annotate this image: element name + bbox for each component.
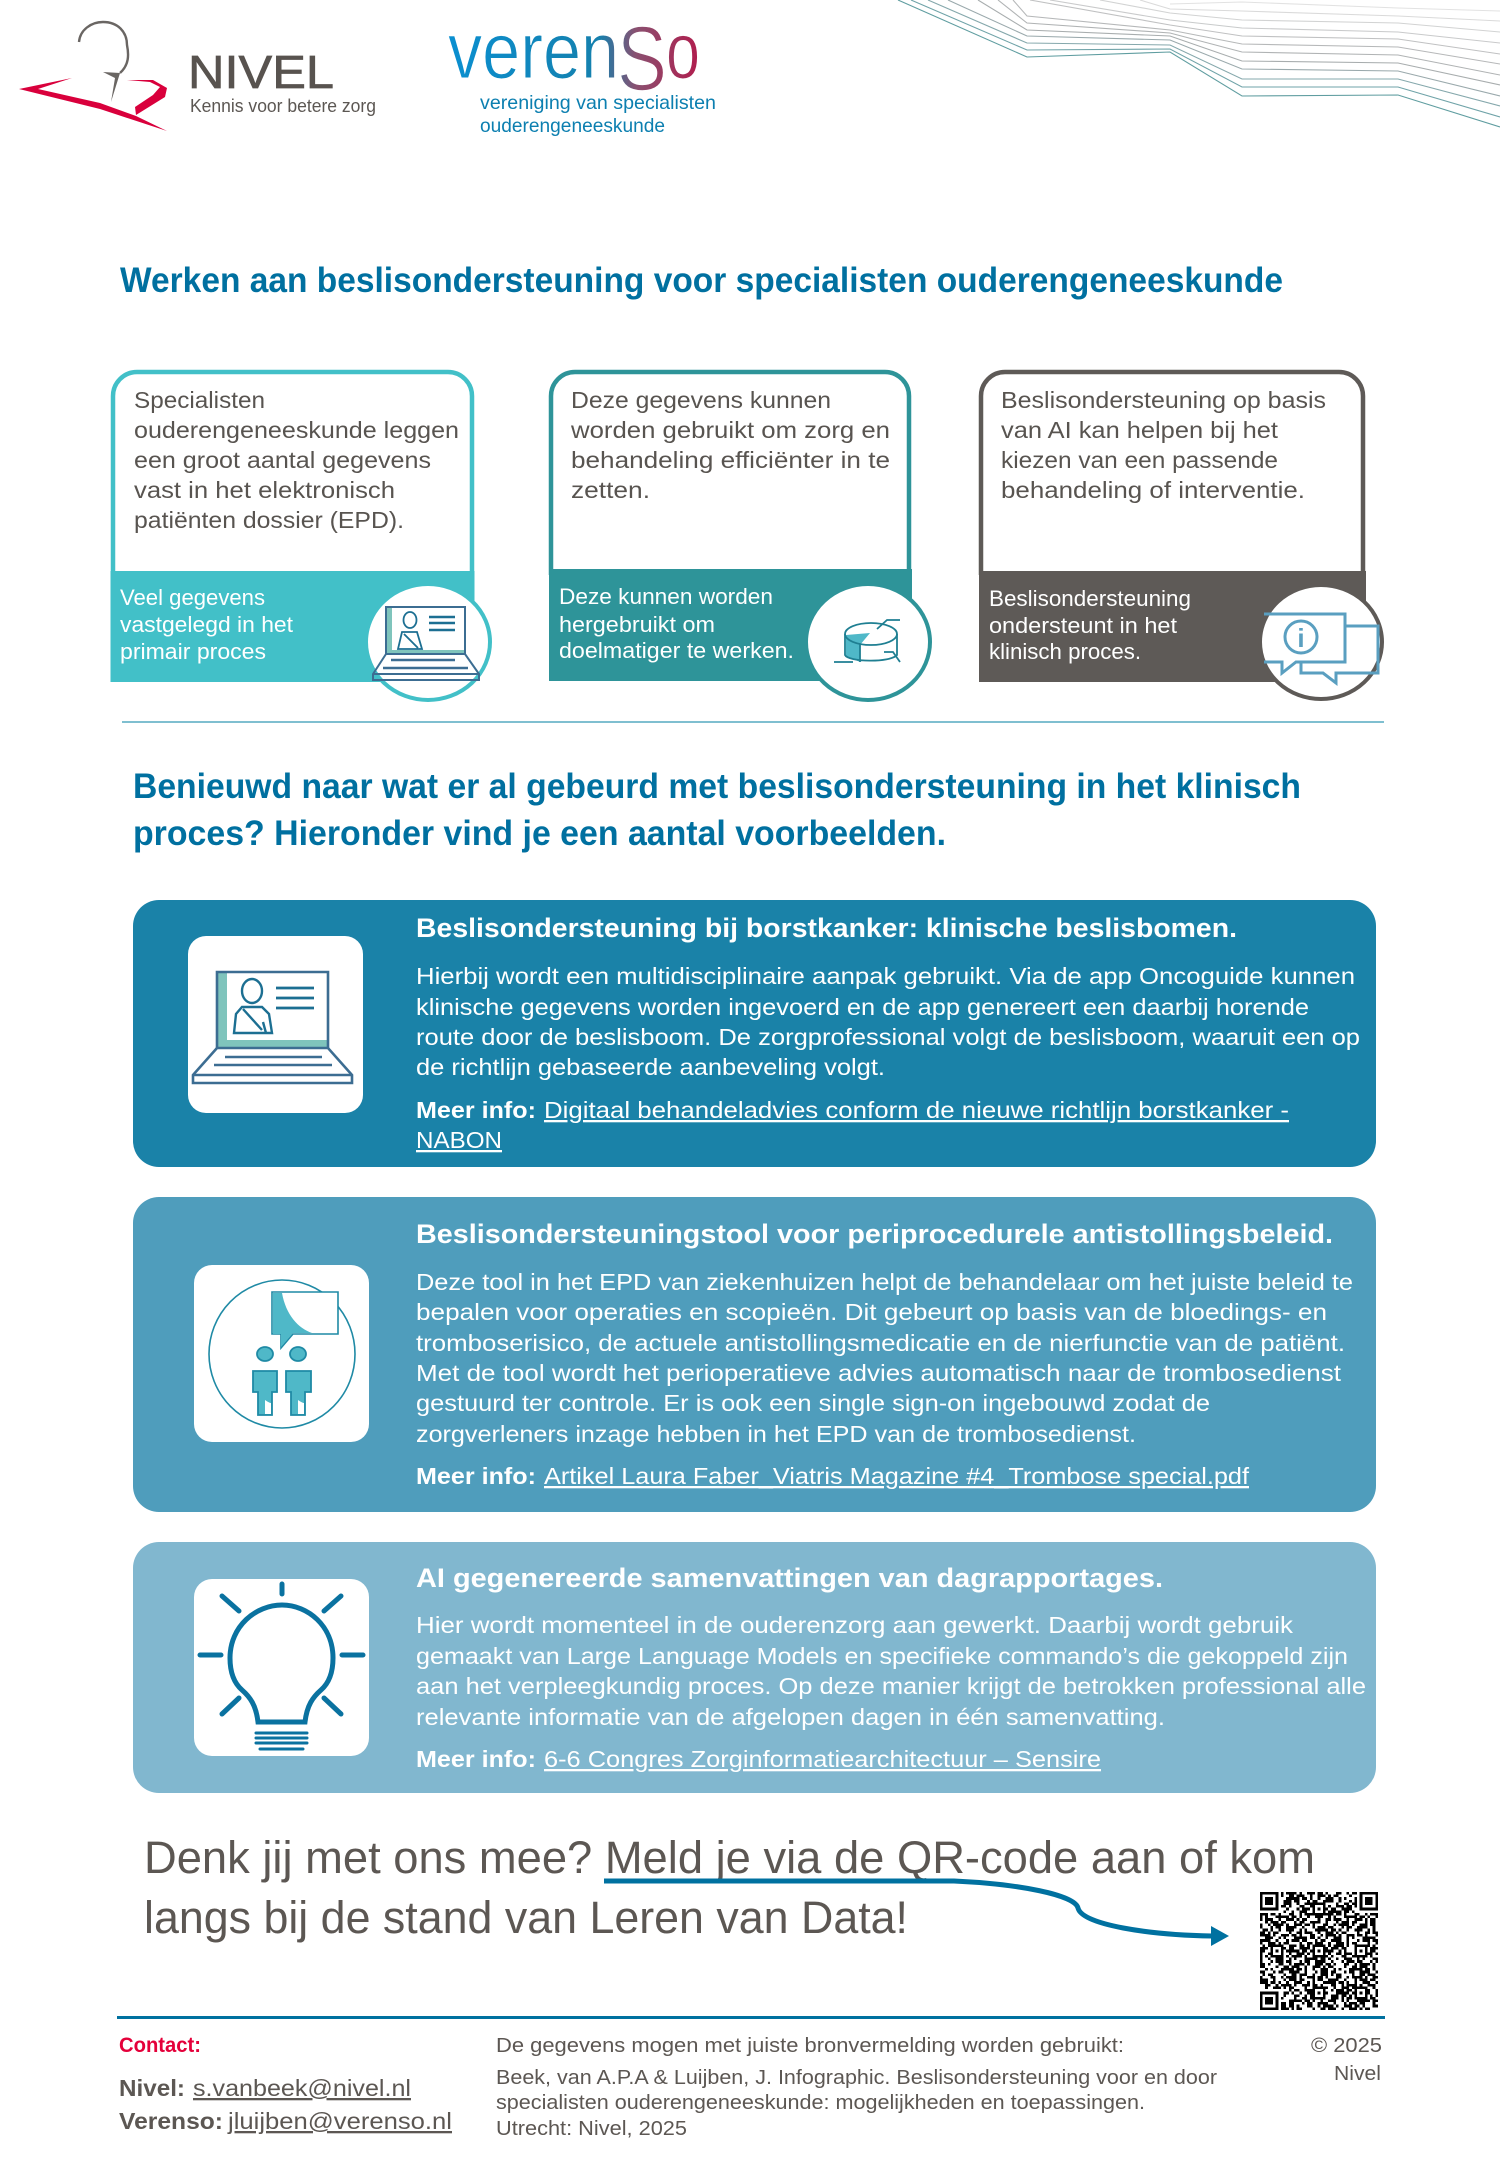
- text: card band: doelmatiger te werken.: [559, 638, 794, 663]
- panel: card veel gegevens: [110, 372, 490, 700]
- title: Werken aan beslisondersteuning voor specialisten ouderengeneeskunde: [120, 261, 1283, 300]
- text: card body: behandeling efficiënter in te: [571, 447, 890, 473]
- text: card band: Deze kunnen worden: [559, 584, 773, 609]
- footer: citation: Beek, van A.P.A & Luijben, J. Infographic. Beslisondersteuning voor en door: [496, 2066, 1217, 2089]
- text: heading: AI gegenereerde samenvattingen van dagrapportages.: [416, 1563, 1163, 1593]
- text: description: zorgverleners inzage hebben in het EPD van de trombosedienst.: [416, 1421, 1136, 1447]
- text: card body: patiënten dossier (EPD).: [134, 507, 404, 533]
- footer: citation: Utrecht: Nivel, 2025: [496, 2117, 687, 2140]
- text: call to action: [144, 1832, 1315, 1943]
- text: card body: ouderengeneeskunde leggen: [134, 417, 459, 443]
- text: description: tromboserisico, de actuele antistollingsmedicatie en de nierfunctie van de patiënt.: [416, 1330, 1345, 1356]
- text: card band: hergebruikt om: [559, 612, 715, 637]
- icon: info chat bubbles in circle: i: [1297, 623, 1305, 653]
- text: description: Met de tool wordt het perioperatieve advies automatisch naar de trombosedienst: [416, 1360, 1342, 1386]
- text: description: Deze tool in het EPD van ziekenhuizen helpt de behandelaar om het juiste beleid te: [416, 1269, 1353, 1295]
- footer: contact: s.vanbeek@nivel.nl: [193, 2075, 411, 2101]
- text: card band: [989, 586, 1191, 664]
- icon: info chat bubbles in circle: [1260, 585, 1382, 699]
- text: card band: primair proces: [120, 639, 266, 664]
- text: heading: Beslisondersteuning bij borstkanker: klinische beslisbomen.: [416, 913, 1237, 943]
- text: card body: van AI kan helpen bij het: [1001, 417, 1278, 443]
- text: card body: [1001, 387, 1326, 503]
- logo: Verenso: vereniging van specialisten: [480, 92, 716, 114]
- text: description: Hierbij wordt een multidisciplinaire aanpak gebruikt. Via de app Oncoguide kunnen: [416, 963, 1355, 989]
- text: heading: Beslisondersteuningstool voor periprocedurele antistollingsbeleid.: [416, 1219, 1333, 1249]
- footer: copyright: Nivel: [1334, 2062, 1381, 2085]
- text: card body: een groot aantal gegevens: [134, 447, 431, 473]
- footer: copyright: [1311, 2034, 1382, 2085]
- panel: antistollingsbeleid: [133, 1197, 1376, 1512]
- text: description: gestuurd ter controle. Er is ook een single sign-on ingebouwd zodat de: [416, 1390, 1210, 1416]
- text: meer info link: NABON: [416, 1127, 502, 1153]
- footer: contact: Verenso:: [119, 2108, 223, 2134]
- footer: citation: [496, 2034, 1217, 2140]
- text: card body: kiezen van een passende: [1001, 447, 1278, 473]
- text: meer info link: Artikel Laura Faber_Viatris Magazine #4_Trombose special.pdf: [544, 1463, 1250, 1489]
- text: card body: zetten.: [571, 477, 650, 503]
- text: description: Hier wordt momenteel in de ouderenzorg aan gewerkt. Daarbij wordt gebruik: [416, 1612, 1294, 1638]
- heading: voorbeelden: Benieuwd naar wat er al gebeurd met beslisondersteuning in het klinisch: [133, 767, 1301, 806]
- logo: Nivel: [19, 22, 376, 131]
- text: card body: [134, 387, 459, 533]
- text: card body: Beslisondersteuning op basis: [1001, 387, 1326, 413]
- icon: laptop: [188, 936, 363, 1113]
- icon: two people talking: [194, 1265, 369, 1442]
- logo: Nivel: NIVEL: [188, 46, 334, 98]
- text: card band: Veel gegevens: [120, 585, 265, 610]
- heading: voorbeelden: [133, 767, 1301, 853]
- text: description: de richtlijn gebaseerde aanbeveling volgt.: [416, 1054, 885, 1080]
- text: meer info link: 6-6 Congres Zorginformatiearchitectuur – Sensire: [544, 1746, 1101, 1772]
- text: card band: vastgelegd in het: [120, 612, 293, 637]
- panel: card hergebruik: [549, 372, 930, 700]
- text: call to action: langs bij de stand van Leren van Data!: [144, 1892, 908, 1943]
- text: description: bepalen voor operaties en scopieën. Dit gebeurt op basis van de bloedings- en: [416, 1299, 1327, 1325]
- panel: card klinisch proces: [979, 372, 1382, 699]
- icon: database disk in circle: [806, 584, 930, 700]
- text: description: aan het verpleegkundig proces. Op deze manier krijgt de betrokken professional alle: [416, 1673, 1366, 1699]
- logo: Nivel: Kennis voor betere zorg: [190, 96, 376, 116]
- text: card body: [570, 387, 890, 503]
- logo: Verenso: o: [666, 6, 700, 95]
- footer: contact: [119, 2034, 452, 2134]
- text: meer info link: Meer info:: [416, 1097, 536, 1123]
- footer: citation: specialisten ouderengeneeskunde: mogelijkheden en toepassingen.: [496, 2091, 1145, 2114]
- text: meer info link: Meer info:: [416, 1463, 536, 1489]
- logo: Verenso: S: [617, 8, 667, 110]
- text: card body: Specialisten: [134, 387, 265, 413]
- text: description: route door de beslisboom. De zorgprofessional volgt de beslisboom, waaruit een op: [416, 1024, 1360, 1050]
- icon: lightbulb: [194, 1579, 369, 1756]
- heading: voorbeelden: proces? Hieronder vind je een aantal voorbeelden.: [133, 814, 946, 853]
- text: card band: klinisch proces.: [989, 639, 1141, 664]
- text: card band: [559, 584, 794, 663]
- logo: Verenso: ouderengeneeskunde: [480, 115, 665, 137]
- text: card band: ondersteunt in het: [989, 613, 1177, 638]
- text: card body: vast in het elektronisch: [134, 477, 395, 503]
- footer: copyright: © 2025: [1311, 2034, 1382, 2057]
- text: description: [416, 1612, 1366, 1730]
- text: description: relevante informatie van de afgelopen dagen in één samenvatting.: [416, 1704, 1165, 1730]
- footer: contact: jluijben@verenso.nl: [227, 2108, 452, 2134]
- text: description: [416, 963, 1360, 1080]
- text: card body: worden gebruikt om zorg en: [570, 417, 890, 443]
- text: meer info link: Digitaal behandeladvies conform de nieuwe richtlijn borstkanker -: [544, 1097, 1289, 1123]
- arrow: underline to QR code: [604, 1881, 1229, 1946]
- text: meer info link: Meer info:: [416, 1746, 536, 1772]
- footer: contact: Contact:: [119, 2034, 201, 2057]
- QR code: [1260, 1892, 1378, 2010]
- text: card band: [120, 585, 293, 664]
- text: card band: Beslisondersteuning: [989, 586, 1191, 611]
- text: card body: Deze gegevens kunnen: [571, 387, 831, 413]
- footer: contact: Nivel:: [119, 2075, 185, 2101]
- icon: laptop in circle: [366, 584, 490, 700]
- panel: samenvattingen: [133, 1542, 1376, 1793]
- panel: borstkanker: [133, 900, 1376, 1167]
- text: card body: behandeling of interventie.: [1001, 477, 1305, 503]
- footer: citation: De gegevens mogen met juiste bronvermelding worden gebruikt:: [496, 2034, 1124, 2057]
- text: description: gemaakt van Large Language Models en specifieke commando’s die gekoppeld zijn: [416, 1643, 1348, 1669]
- text: description: [416, 1269, 1353, 1447]
- text: meer info link: [416, 1097, 1289, 1153]
- logo: Verenso: veren: [448, 6, 619, 95]
- text: description: klinische gegevens worden ingevoerd en de app genereert een daarbij horende: [416, 994, 1309, 1020]
- logo: Verenso: [448, 6, 716, 137]
- text: call to action: Denk jij met ons mee? Meld je via de QR-code aan of kom: [144, 1832, 1315, 1883]
